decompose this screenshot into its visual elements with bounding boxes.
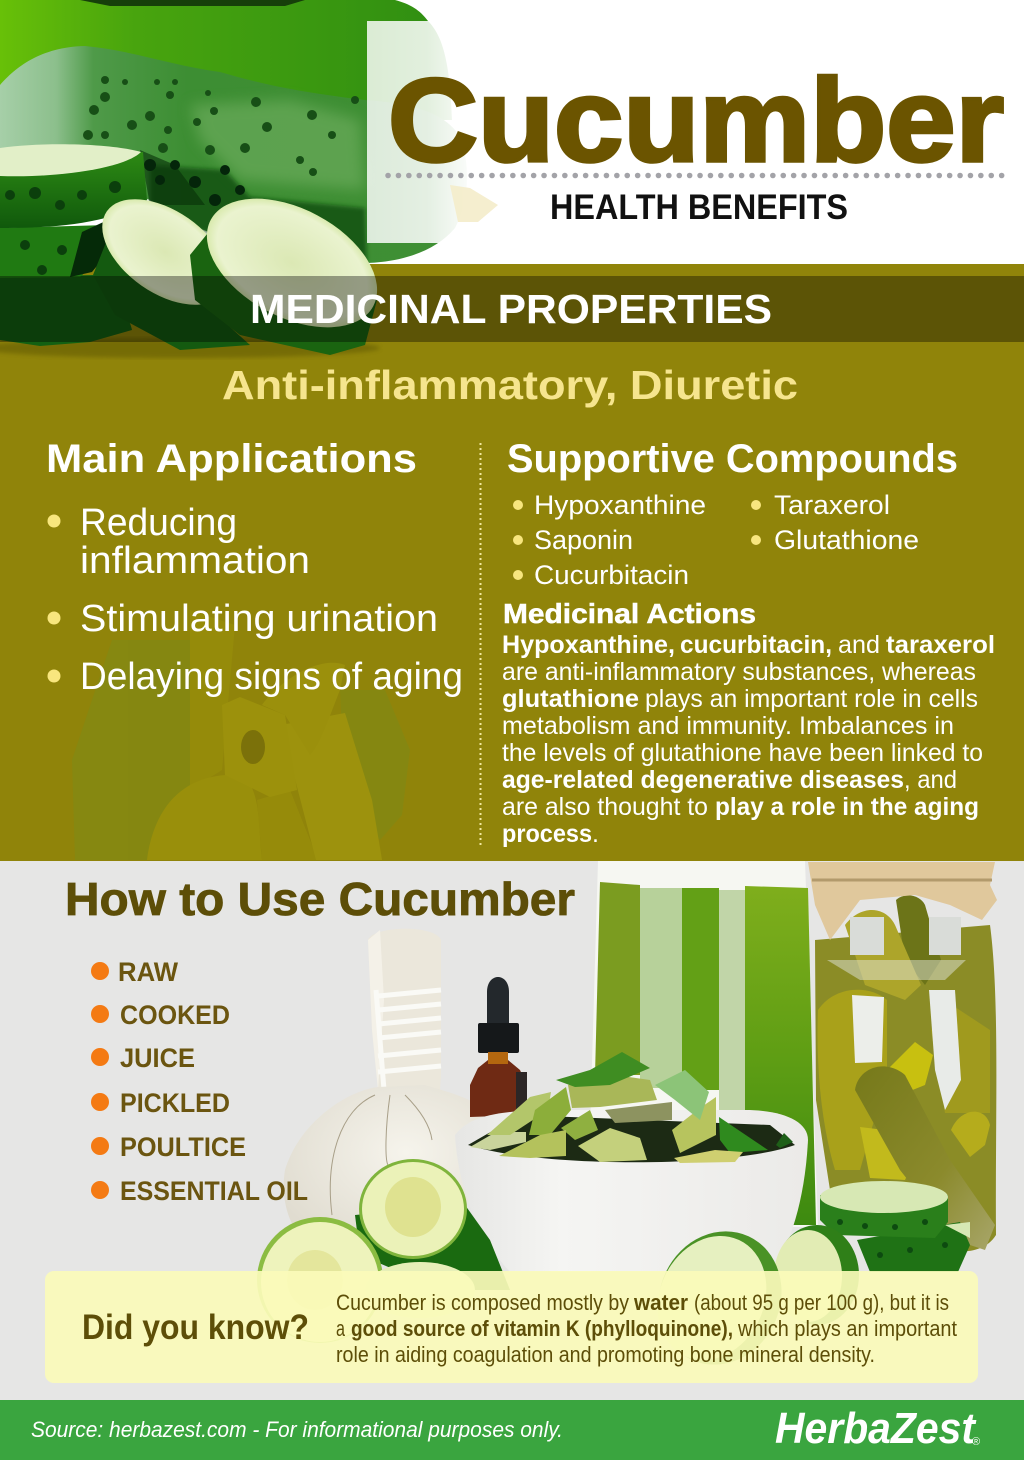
- list: forms of use: POULTICE: [120, 1132, 246, 1162]
- heading: medicinal actions: Medicinal Actions: [503, 598, 756, 629]
- photo: poultice bundle: [284, 929, 487, 1235]
- panel: how to use background: [0, 861, 1024, 1400]
- bullet list: applications: inflammation: [80, 540, 310, 582]
- heading: main applications: Main Applications: [46, 437, 417, 481]
- text block: medicinal actions: plays an important role in cells: [645, 685, 978, 713]
- text block: medicinal actions: glutathione: [502, 685, 639, 713]
- photo: juice glass: [590, 861, 818, 1227]
- bullet list: compounds: Cucurbitacin: [534, 560, 689, 590]
- list: forms of use: ESSENTIAL OIL: [120, 1176, 308, 1206]
- callout: did you know: [45, 1271, 978, 1383]
- title: Cucumber: [388, 55, 1004, 187]
- callout text: water: [633, 1290, 688, 1315]
- text block: medicinal actions: .: [592, 820, 599, 848]
- text block: medicinal actions: cucurbitacin,: [680, 631, 832, 659]
- bullet list: compounds: Taraxerol: [774, 490, 890, 520]
- text block: medicinal actions: [502, 631, 995, 848]
- photo: cucumbers: [0, 0, 467, 358]
- photo: cucumber slices: [257, 1159, 970, 1385]
- text block: medicinal actions: age-related degenerative diseases: [502, 766, 904, 794]
- text block: medicinal actions: , and: [904, 766, 957, 794]
- cucumber light patches: [190, 100, 365, 190]
- heading band: medicinal properties: [0, 276, 1024, 342]
- panel: medicinal properties background: [0, 264, 1024, 861]
- bullet list: compounds: Saponin: [534, 525, 633, 555]
- illustration: faded woman holding toilet roll: [72, 610, 410, 860]
- front right slices: [775, 1225, 859, 1325]
- panel: supportive compounds: [502, 437, 995, 848]
- panel: white title backdrop: [367, 21, 498, 243]
- centre slice: [93, 225, 250, 350]
- bullet list: applications: Reducing: [80, 502, 237, 544]
- photo: pickle jar: [808, 862, 997, 1251]
- bullet list: compounds: Glutathione: [774, 525, 919, 555]
- callout text: role in aiding coagulation and promoting bone mineral density.: [336, 1342, 875, 1367]
- bullet list: applications: Stimulating urination: [80, 598, 438, 640]
- callout text: good source of vitamin K (phylloquinone),: [351, 1316, 733, 1341]
- heading: how to use cucumber: How to Use Cucumber: [65, 873, 575, 925]
- text block: medicinal actions: are also thought to: [502, 793, 708, 821]
- front slice: [190, 212, 377, 355]
- panel: main applications: [46, 437, 463, 698]
- text block: medicinal actions: metabolism and immunity. Imbalances in: [502, 712, 954, 740]
- callout text: which plays an important: [737, 1316, 957, 1341]
- list: forms of use: [91, 957, 308, 1206]
- footer bar: ®: [972, 1436, 980, 1448]
- slices left stack: [0, 275, 132, 346]
- bullet list: applications: [48, 502, 463, 698]
- text block: medicinal actions: and: [838, 631, 880, 659]
- list: forms of use: COOKED: [120, 1000, 230, 1030]
- heading: medicinal properties: MEDICINAL PROPERTIES: [250, 286, 772, 332]
- gray strip under callout: [0, 1383, 1024, 1400]
- text block: medicinal actions: taraxerol: [886, 631, 995, 659]
- heading: supportive compounds: Supportive Compounds: [507, 437, 958, 481]
- bullet list: compounds: [513, 490, 919, 590]
- subheading: properties list: Anti-inflammatory, Diuretic: [222, 362, 798, 408]
- text block: medicinal actions: play a role in the aging: [715, 793, 979, 821]
- callout text: [336, 1290, 957, 1367]
- photo: essential oil dropper: [470, 977, 527, 1117]
- footer bar: [0, 1400, 1024, 1460]
- callout text: (about 95 g per 100 g), but it is: [694, 1290, 949, 1315]
- source note: Source: herbazest.com - For informational purposes only.: [31, 1417, 563, 1442]
- right stack: [857, 1222, 970, 1272]
- subtitle: HEALTH BENEFITS: [550, 188, 848, 227]
- text block: medicinal actions: are anti-inflammatory substances, whereas: [502, 658, 976, 686]
- photo: bowl with cucumber salad: [455, 1052, 808, 1272]
- bullet list: applications: Delaying signs of aging: [80, 656, 463, 698]
- dotted divider: [388, 173, 1003, 178]
- callout text: Cucumber is composed mostly by: [336, 1290, 629, 1315]
- text block: medicinal actions: Hypoxanthine,: [502, 631, 675, 659]
- callout heading: Did you know?: [82, 1308, 309, 1347]
- text block: medicinal actions: process: [502, 820, 592, 848]
- logo: HerbaZest: HerbaZest: [775, 1404, 977, 1453]
- bullet list: compounds: Hypoxanthine: [534, 490, 706, 520]
- list: forms of use: PICKLED: [120, 1088, 230, 1118]
- list: forms of use: JUICE: [120, 1043, 195, 1073]
- list: forms of use: RAW: [118, 957, 178, 987]
- callout text: a: [336, 1316, 346, 1341]
- text block: medicinal actions: the levels of glutathione have been linked to: [502, 739, 983, 767]
